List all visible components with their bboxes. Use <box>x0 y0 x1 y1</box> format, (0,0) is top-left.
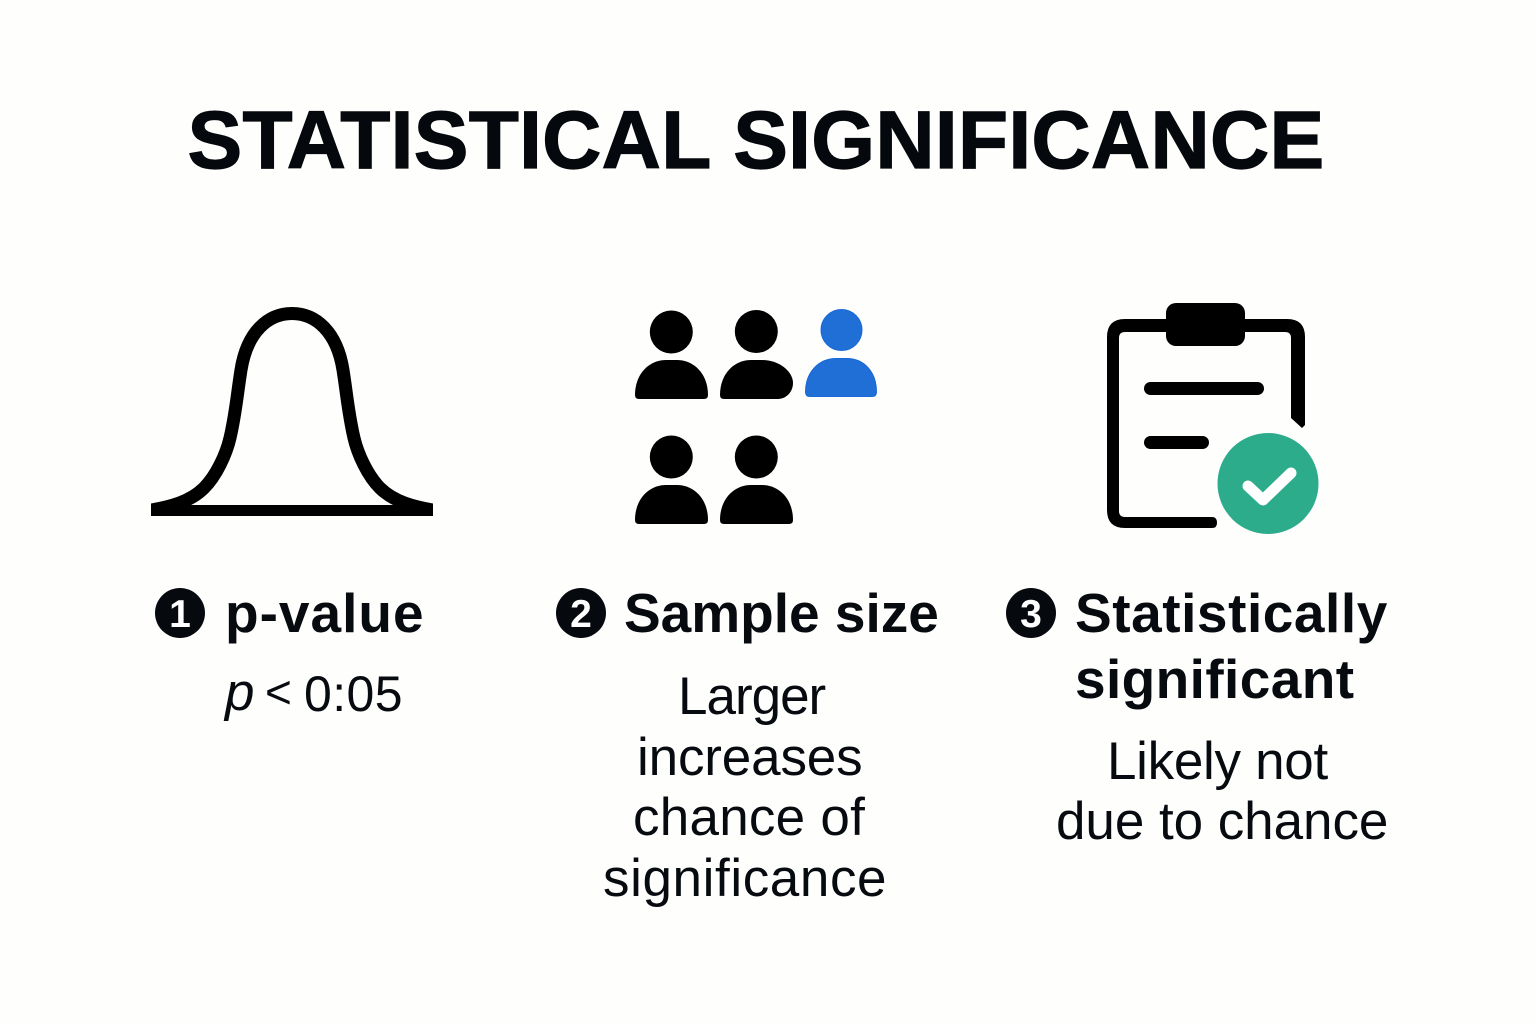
icon: people group <box>635 309 877 524</box>
text: significance description: due to chance <box>1056 792 1388 851</box>
heading: statistically significant: significant <box>1075 648 1354 710</box>
text: sample size description: increases <box>637 728 862 787</box>
icon: clipboard with check <box>1107 303 1318 534</box>
badge 2: 2 <box>570 593 592 636</box>
badge 1 <box>155 588 205 638</box>
text: sample size description <box>603 667 887 908</box>
heading: p-value: p-value <box>225 582 425 644</box>
text: sample size description: Larger <box>678 667 825 726</box>
heading: statistically significant: Statistically <box>1075 582 1388 644</box>
text: p threshold: p <box>225 663 254 722</box>
badge 3: 3 <box>1020 593 1042 636</box>
icon: person 1 <box>635 310 708 399</box>
heading: statistically significant <box>1075 582 1388 710</box>
text: significance description: Likely not <box>1107 732 1328 791</box>
badge 1: 1 <box>169 593 191 636</box>
text: sample size description: chance of <box>633 788 865 847</box>
text: p threshold: 0:05 <box>304 666 403 722</box>
icon: person 2 <box>720 310 793 399</box>
text: sample size description: significance <box>603 849 887 908</box>
text: significance description <box>1056 732 1388 851</box>
badge 2 <box>556 588 606 638</box>
heading: sample size: Sample size <box>624 582 939 644</box>
icon: bell curve <box>151 307 433 516</box>
text: p threshold <box>224 663 403 722</box>
icon: person 4 <box>635 436 708 524</box>
title: STATISTICAL SIGNIFICANCE <box>188 95 1324 186</box>
text: p threshold: < <box>265 666 292 718</box>
icon: person blue <box>806 310 876 396</box>
icon: person 5 <box>720 436 793 524</box>
badge 3 <box>1006 588 1056 638</box>
